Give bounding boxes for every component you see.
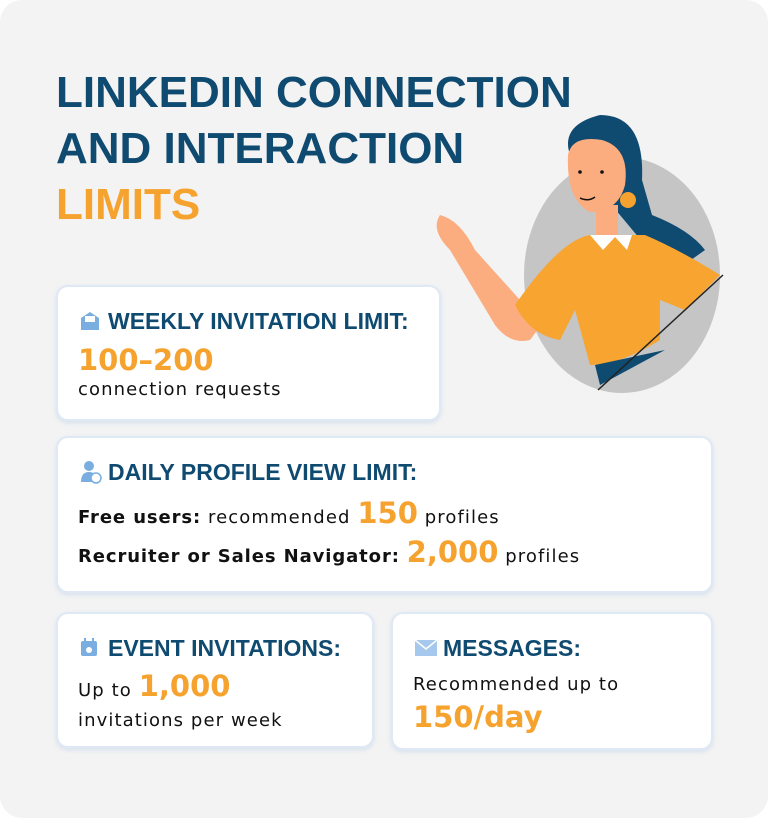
text: 100–200	[78, 343, 214, 377]
heading: WEEKLY INVITATION LIMIT:	[108, 308, 409, 334]
text: Recommended up to	[413, 674, 619, 695]
illustration: woman pointing	[436, 115, 724, 393]
text: Up to 1,000	[78, 669, 230, 703]
title: LINKEDIN CONNECTION	[56, 68, 572, 117]
title: LIMITS	[56, 180, 200, 229]
icon: envelope	[81, 312, 99, 330]
text	[78, 669, 283, 731]
title: AND INTERACTION	[56, 124, 464, 173]
text	[78, 343, 282, 400]
text	[413, 674, 619, 734]
text: recruiter: Recruiter or Sales Navigator: 2,000 profiles	[78, 535, 580, 569]
title	[56, 68, 572, 229]
text: free users: Free users: recommended 150 profiles	[78, 496, 500, 530]
card: daily profile view limit	[56, 436, 713, 593]
card: event invitations	[56, 612, 374, 748]
card: messages	[391, 612, 713, 750]
card: weekly invitation limit	[56, 285, 441, 421]
text: connection requests	[78, 379, 282, 400]
text: invitations per week	[78, 710, 283, 731]
heading: DAILY PROFILE VIEW LIMIT:	[108, 459, 417, 485]
icon: person with eye	[81, 461, 102, 484]
icon: mail	[415, 640, 437, 656]
heading: EVENT INVITATIONS:	[108, 635, 341, 661]
icon: calendar	[81, 638, 97, 656]
heading: MESSAGES:	[443, 635, 581, 661]
text: 150/day	[413, 700, 542, 734]
